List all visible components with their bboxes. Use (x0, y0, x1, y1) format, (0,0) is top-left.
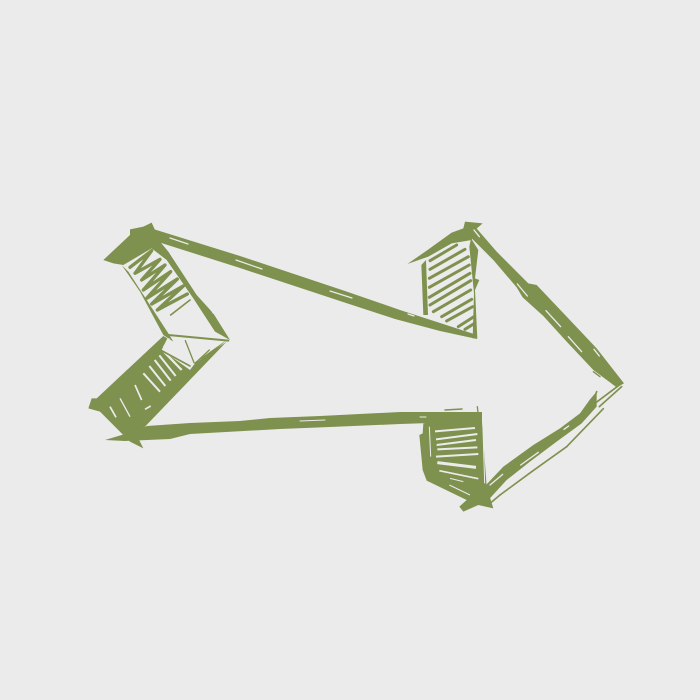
lower left barb (88, 336, 227, 448)
top shaft edge (150, 228, 477, 339)
arrowhead lower barb (419, 407, 493, 512)
arrowhead upper barb (407, 222, 483, 338)
arrowhead upper edge (465, 223, 624, 387)
bottom shaft edge (105, 409, 482, 441)
arrowhead lower edge (486, 383, 622, 503)
upper left barb (103, 223, 230, 342)
arrow drawing (88, 222, 624, 512)
